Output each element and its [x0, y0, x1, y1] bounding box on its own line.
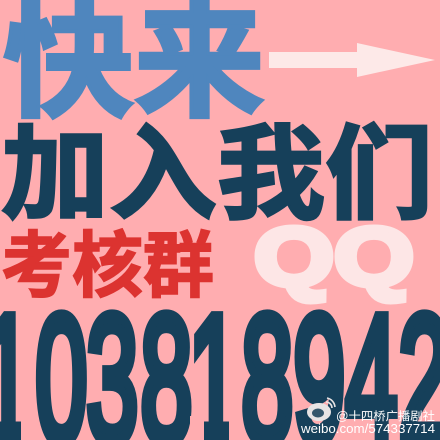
heading: 加入我们: 加入我们	[1, 117, 433, 232]
watermark: account name: @十四桥广播剧社	[336, 409, 436, 423]
watermark: weibo url: weibo.com/574337714	[300, 422, 435, 436]
label: 考核群: 考核群	[1, 227, 214, 307]
label: QQ: QQ	[254, 210, 414, 303]
arrow pointing right	[269, 43, 435, 77]
watermark: weibo logo	[307, 398, 335, 421]
